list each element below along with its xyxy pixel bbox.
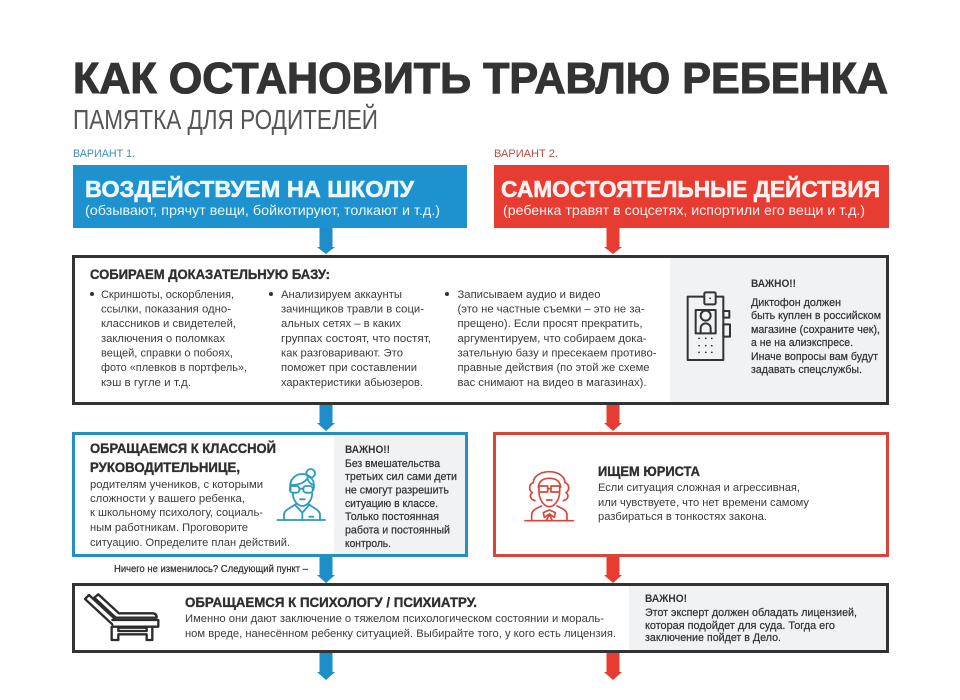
bullet column 2: как разговаривают. Это [281, 348, 403, 360]
icon: lounge chair [85, 594, 158, 640]
arrow: red 4 [604, 653, 622, 680]
text: lawyer [598, 482, 810, 523]
text: psychologist [185, 613, 616, 640]
callout: class teacher warning: Только постоянная [345, 511, 439, 523]
callout: psychologist warning: ВАЖНО! [645, 593, 687, 605]
icon: teacher [277, 469, 325, 520]
text: lawyer: или чувствуете, что нет времени самому [598, 497, 810, 509]
subheading: variant 2: (ребенка травят в соцсетях, испортили его вещи и т.д.) [503, 202, 865, 218]
callout: class teacher warning: ВАЖНО!! [345, 444, 390, 456]
callout: psychologist warning: Этот эксперт должен обладать лицензией, [645, 607, 857, 619]
panel: class teacher [74, 434, 466, 556]
bullet column 2: поможет при составлении [281, 362, 417, 374]
panel: psychologist [74, 584, 888, 652]
callout: psychologist warning [645, 593, 857, 644]
callout: psychologist warning: заключение пойдет в Дело. [645, 632, 781, 644]
heading: class teacher [90, 441, 276, 475]
text: class teacher: сложности у вашего ребенка, [90, 493, 245, 505]
arrow: red 1 [604, 228, 622, 254]
bullet column 1: заключения о поломках [101, 333, 225, 345]
arrow: red 3 [604, 557, 622, 583]
callout: class teacher warning: третьих сил сами дети [345, 471, 457, 483]
callout: psychologist warning: которая подойдет для суда. Тогда его [645, 620, 835, 632]
arrow: blue 3 [317, 557, 335, 583]
callout: class teacher warning: Без вмешательства [345, 458, 441, 470]
arrow: blue 2 [317, 405, 335, 431]
text: psychologist: Именно они дают заключение о тяжелом психологическом состоянии и мораль- [185, 613, 604, 625]
text: class teacher: родителям учеников, с которыми [90, 479, 263, 491]
subtitle: ПАМЯТКА ДЛЯ РОДИТЕЛЕЙ [73, 104, 378, 135]
bullet column 3: правные действия (по этой же схеме [458, 362, 650, 374]
callout: class teacher warning: контроль. [345, 538, 391, 550]
heading: lawyer: ИЩЕМ ЮРИСТА [598, 464, 700, 479]
callout: class teacher warning: не смогут разрешить [345, 484, 449, 496]
note: next step: Ничего не изменилось? Следующий пункт – [114, 563, 308, 575]
heading: class teacher: РУКОВОДИТЕЛЬНИЦЕ, [90, 460, 240, 475]
bullet column 1: Скриншоты, оскорбления, [101, 289, 234, 301]
callout: recorder warning: магазине (сохраните чек), [751, 324, 880, 336]
icon: lawyer [525, 472, 573, 521]
bullet column 3: зательную базу и пресекаем противо- [458, 348, 657, 360]
bullet column 3: вас снимают на видео в магазинах). [458, 377, 646, 389]
bullet column 1: фото «плевков в портфель», [101, 362, 247, 374]
text: lawyer: разбираться в тонкостях закона. [598, 511, 767, 523]
heading: class teacher: ОБРАЩАЕМСЯ К КЛАССНОЙ [90, 441, 276, 456]
bullet column 1 [90, 289, 247, 389]
callout: recorder warning: а не на алиэкспресе. [751, 337, 853, 349]
callout: recorder warning: Иначе вопросы вам будут [751, 351, 878, 363]
heading: variant 1: ВОЗДЕЙСТВУЕМ НА ШКОЛУ [85, 175, 415, 202]
label: variant 1: ВАРИАНТ 1. [73, 148, 135, 160]
heading: evidence base: СОБИРАЕМ ДОКАЗАТЕЛЬНУЮ БАЗУ: [90, 267, 330, 282]
callout: recorder warning [751, 278, 881, 376]
callout: recorder warning: Диктофон должен [751, 297, 841, 309]
bullet column 2: группах состоят, что постят, [281, 333, 431, 345]
panel: lawyer [494, 434, 888, 556]
arrow: red 2 [604, 405, 622, 431]
bullet column 1: ссылки, показания одно- [101, 304, 231, 316]
bullet column 2 [269, 289, 431, 389]
label: variant 2: ВАРИАНТ 2. [494, 148, 558, 160]
subheading: variant 1: (обзывают, прячут вещи, бойкотируют, толкают и т.д.) [85, 202, 440, 218]
callout: recorder warning: быть куплен в российском [751, 310, 881, 322]
heading: variant 2: САМОСТОЯТЕЛЬНЫЕ ДЕЙСТВИЯ [501, 175, 880, 202]
bullet column 3: Записываем аудио и видео [458, 289, 600, 301]
callout: class teacher warning: ситуацию в классе. [345, 498, 438, 510]
panel: variant 2 header [494, 165, 889, 228]
callout: class teacher warning [345, 444, 457, 550]
panel: variant 1 header [73, 165, 467, 228]
panel: evidence base [74, 256, 888, 404]
bullet column 2: характеристики абьюзеров. [281, 377, 423, 389]
bullet column 2: альных сетях – в каких [281, 318, 402, 330]
text: psychologist: ном вреде, нанесённом ребенку ситуацией. Выбирайте того, у кого есть лицензия. [185, 628, 616, 640]
text: class teacher: ным работникам. Проговорите [90, 522, 248, 534]
bullet column 2: зачинщиков травли в соци- [281, 304, 424, 316]
heading: psychologist: ОБРАЩАЕМСЯ К ПСИХОЛОГУ / ПСИХИАТРУ. [185, 595, 477, 610]
text: lawyer: Если ситуация сложная и агрессивная, [598, 482, 800, 494]
callout: recorder warning: задавать спецслужбы. [751, 364, 862, 376]
title: КАК ОСТАНОВИТЬ ТРАВЛЮ РЕБЕНКА [73, 54, 888, 103]
bullet column 1: классников и свидетелей, [101, 318, 236, 330]
bullet column 1: вещей, справки о побоях, [101, 348, 233, 360]
icon: voice recorder [688, 292, 730, 360]
text: class teacher: к школьному психологу, социаль- [90, 507, 263, 519]
bullet column 2: Анализируем аккаунты [281, 289, 402, 301]
callout: recorder warning: ВАЖНО!! [751, 278, 796, 290]
callout: class teacher warning: работа и постоянный [345, 524, 450, 536]
bullet column 1: кэш в гугле и т.д. [101, 377, 191, 389]
bullet column 3: (это не частные съемки – это не за- [458, 304, 645, 316]
text: class teacher: ситуацию. Определите план действий. [90, 537, 290, 549]
text: class teacher [90, 479, 290, 549]
arrow: blue 4 [317, 653, 335, 680]
bullet column 3 [445, 289, 657, 389]
bullet column 3: прещено). Если просят прекратить, [458, 318, 642, 330]
bullet column 3: аргументируем, что собираем дока- [458, 333, 647, 345]
arrow: blue 1 [317, 228, 335, 254]
